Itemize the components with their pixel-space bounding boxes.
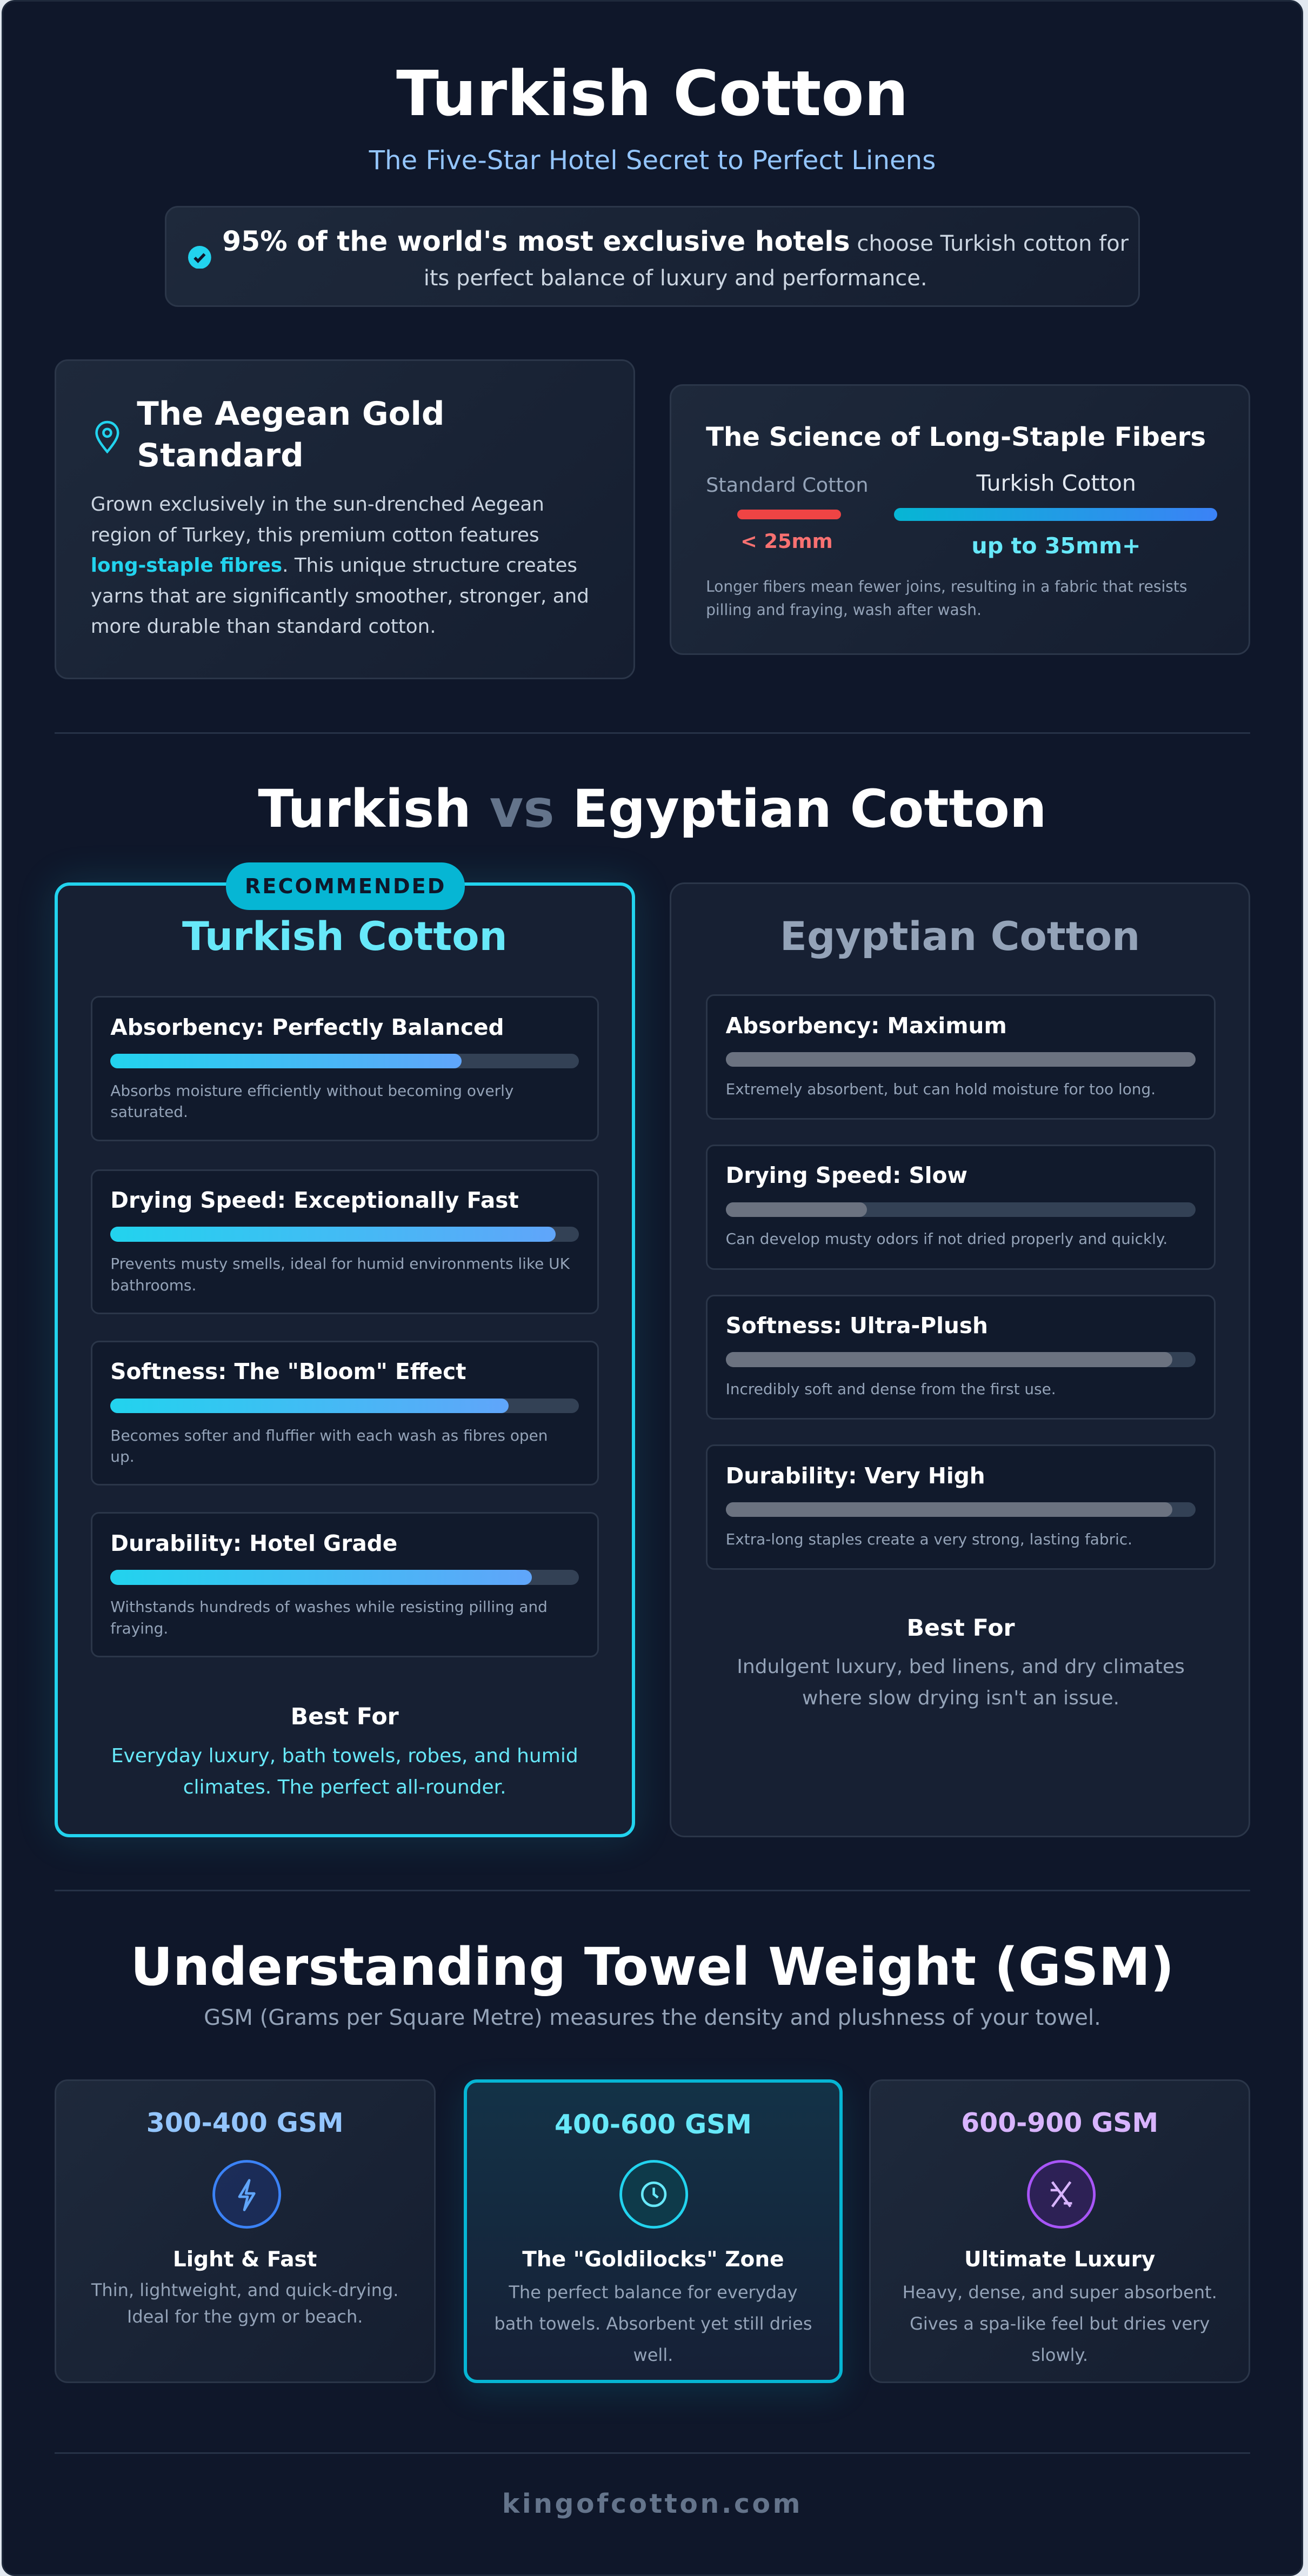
fiber chart: up to 35mm+ xyxy=(971,533,1141,559)
best for: Indulgent luxury, bed linens, and dry climates where slow drying isn't an issue. xyxy=(737,1656,1185,1709)
best for: Best For xyxy=(906,1615,1015,1642)
heading: The Science of Long-Staple Fibers xyxy=(706,422,1206,452)
GSM card: 300-400 xyxy=(55,2079,436,2383)
item: softness: Becomes softer and fluffier with each wash as fibres open up. xyxy=(110,1427,548,1466)
item: durability: Durability: Very High xyxy=(726,1463,985,1489)
heading: Standard xyxy=(137,437,304,474)
body text xyxy=(91,493,589,638)
GSM card: 400-600: The "Goldilocks" Zone xyxy=(522,2247,784,2272)
item: durability: Extra-long staples create a very strong, lasting fabric. xyxy=(726,1530,1132,1548)
item: drying speed: Drying Speed: Exceptionally Fast xyxy=(110,1187,519,1213)
item: absorbency: Absorbency: Perfectly Balanced xyxy=(110,1014,504,1040)
footer: kingofcotton.com xyxy=(502,2488,803,2519)
icon: lightning xyxy=(212,2160,281,2229)
fiber chart: Standard Cotton xyxy=(706,473,869,497)
GSM card: 300-400: 300-400 GSM xyxy=(146,2107,344,2138)
callout text: 95% of the world's most exclusive hotels choose Turkish cotton for xyxy=(222,225,1129,257)
item: softness: Softness: Ultra-Plush xyxy=(726,1313,988,1339)
heading xyxy=(137,396,445,474)
GSM card: 400-600: 400-600 GSM xyxy=(555,2109,752,2140)
icon: luxury xyxy=(1027,2160,1096,2229)
card title: Turkish Cotton xyxy=(182,914,508,960)
panel: Turkish cotton xyxy=(55,882,635,1837)
body text: Grown exclusively in the sun-drenched Aegean xyxy=(91,493,544,516)
GSM card: 600-900: Heavy, dense, and super absorbent. Gives a spa-like feel but dries very slowly. xyxy=(903,2282,1217,2365)
best for: Everyday luxury, bath towels, robes, and humid climates. The perfect all-rounder. xyxy=(111,1745,578,1798)
item: durability xyxy=(91,1512,599,1657)
fiber chart: < 25mm xyxy=(740,530,833,553)
best for: Best For xyxy=(291,1703,399,1730)
body text: more durable than standard cotton. xyxy=(91,615,436,638)
item: drying speed xyxy=(706,1145,1216,1270)
GSM card: 600-900 xyxy=(869,2079,1250,2383)
item: absorbency xyxy=(91,996,599,1141)
heading: Turkish vs Egyptian: Turkish vs Egyptian Cotton xyxy=(258,778,1047,839)
item: absorbency: Absorbency: Maximum xyxy=(726,1013,1007,1039)
body text: long-staple fibres. This unique structure creates xyxy=(91,554,577,577)
icon: location pin xyxy=(95,420,119,453)
callout: hotel stat xyxy=(165,206,1140,307)
panel: Aegean gold standard xyxy=(55,359,635,679)
item: drying speed: Prevents musty smells, ideal for humid environments like UK bathrooms. xyxy=(110,1255,570,1294)
callout text: its perfect balance of luxury and performance. xyxy=(424,266,927,291)
item: durability: Withstands hundreds of washes while resisting pilling and fraying. xyxy=(110,1598,548,1637)
icon: check xyxy=(188,246,211,269)
body text: yarns that are significantly smoother, stronger, and xyxy=(91,585,589,607)
item: absorbency: Extremely absorbent, but can hold moisture for too long. xyxy=(726,1080,1156,1098)
panel: long-staple science xyxy=(670,384,1250,655)
body text: region of Turkey, this premium cotton features xyxy=(91,524,539,546)
icon: clock xyxy=(619,2160,689,2229)
best for xyxy=(737,1615,1185,1709)
badge: recommended xyxy=(226,862,465,910)
caption: Longer fibers mean fewer joins, resulting in a fabric that resists pilling and fraying, wash after wash. xyxy=(706,578,1187,619)
item: durability: Durability: Hotel Grade xyxy=(110,1530,397,1556)
heading: GSM: Understanding Towel Weight (GSM) xyxy=(130,1936,1174,1997)
item: softness xyxy=(706,1295,1216,1420)
badge: recommended: RECOMMENDED xyxy=(245,874,446,898)
callout text xyxy=(222,225,1129,291)
panel: Egyptian cotton xyxy=(670,882,1250,1837)
item: softness: Softness: The "Bloom" Effect xyxy=(110,1359,466,1384)
item: softness: Incredibly soft and dense from the first use. xyxy=(726,1380,1056,1398)
best for xyxy=(111,1703,578,1798)
GSM subtitle: GSM (Grams per Square Metre) measures the density and plushness of your towel. xyxy=(204,2005,1101,2030)
GSM card: 400-600: The perfect balance for everyday bath towels. Absorbent yet still dries well. xyxy=(494,2282,812,2365)
item: softness xyxy=(91,1341,599,1486)
fiber chart xyxy=(706,470,1217,559)
GSM card: 300-400: Light & Fast xyxy=(173,2247,317,2272)
fiber chart: Turkish Cotton xyxy=(977,470,1136,496)
GSM card: 400-600 xyxy=(464,2079,843,2383)
item: drying speed xyxy=(91,1169,599,1314)
GSM card: 600-900: Ultimate Luxury xyxy=(964,2247,1155,2272)
GSM card: 300-400: Thin, lightweight, and quick-drying. Ideal for the gym or beach. xyxy=(91,2280,399,2327)
item: absorbency xyxy=(706,994,1216,1120)
item: drying speed: Drying Speed: Slow xyxy=(726,1162,967,1188)
item: drying speed: Can develop musty odors if not dried properly and quickly. xyxy=(726,1230,1167,1248)
heading: The Aegean Gold xyxy=(137,396,445,433)
GSM card: 600-900: 600-900 GSM xyxy=(961,2107,1158,2138)
item: durability xyxy=(706,1444,1216,1570)
card title: Egyptian Cotton xyxy=(780,914,1140,960)
title: Turkish Cotton xyxy=(396,58,909,130)
subtitle: The Five-Star Hotel Secret to Perfect Linens xyxy=(369,145,936,176)
item: absorbency: Absorbs moisture efficiently without becoming overly saturated. xyxy=(110,1082,513,1121)
